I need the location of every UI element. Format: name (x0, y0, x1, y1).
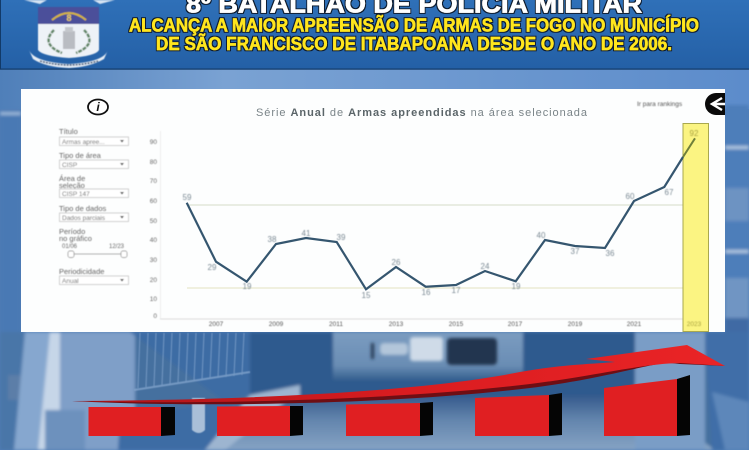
filter sidebar: Período (59, 227, 85, 236)
filter sidebar: CISP (62, 162, 77, 169)
filter sidebar: CISP 147 (62, 191, 90, 198)
data labels: 16 (422, 288, 431, 297)
filter sidebar: 12/23 (109, 244, 125, 250)
battalion emblem (24, 0, 115, 68)
data labels: 19 (512, 282, 521, 291)
data labels: 29 (208, 263, 217, 272)
chart title: Série Anual de Armas apreendidas na área selecionada (256, 107, 588, 119)
y axis: 40 (150, 237, 157, 244)
filter sidebar: seleção (59, 181, 85, 190)
data labels: 59 (183, 193, 192, 202)
data labels: 36 (606, 249, 615, 258)
filter sidebar: Tipo de dados (59, 204, 107, 213)
data line (187, 157, 683, 289)
filter sidebar: Periodicidade (59, 267, 104, 276)
data labels: 67 (665, 188, 674, 197)
info icon: i (96, 100, 100, 114)
y axis: 10 (150, 296, 157, 303)
x axis labels: 2011 (329, 321, 343, 328)
filter sidebar: no gráfico (59, 234, 92, 243)
y axis: 90 (150, 139, 157, 146)
chart panel (21, 89, 725, 332)
y axis: 30 (150, 257, 157, 264)
y axis: 0 (153, 313, 157, 320)
bar 2 (217, 406, 303, 436)
data labels: 60 (626, 192, 635, 201)
y axis: 70 (150, 178, 157, 185)
2023 line segment (683, 138, 695, 157)
rankings link: Ir para rankings (637, 101, 683, 108)
bar 4 (475, 393, 562, 436)
data labels: 41 (302, 229, 311, 238)
data labels: 40 (537, 231, 546, 240)
x axis labels: 2019 (568, 321, 583, 328)
y axis: 80 (150, 159, 157, 166)
reference lines (187, 204, 697, 206)
data labels: 19 (243, 282, 252, 291)
x axis labels: 2015 (449, 321, 464, 328)
filter sidebar: Tipo de área (59, 151, 102, 160)
x axis labels: 2017 (508, 321, 523, 328)
x axis labels: 2007 (209, 321, 224, 328)
filter sidebar (59, 127, 128, 285)
data labels: 38 (268, 235, 277, 244)
data labels: 39 (337, 233, 346, 242)
y axis (150, 131, 702, 320)
icon: back arrow (705, 93, 725, 115)
data labels: 92 (690, 129, 699, 138)
filter sidebar: Armas apree... (62, 139, 105, 146)
data labels: 37 (571, 247, 580, 256)
subtitle (129, 14, 699, 54)
x axis labels (209, 321, 702, 328)
bar 1 (88, 407, 175, 436)
filter sidebar: 01/06 (62, 244, 78, 250)
y axis: 60 (150, 198, 157, 205)
header banner (0, 0, 749, 70)
bar 5 (604, 375, 690, 436)
filter sidebar: Área de (59, 174, 85, 183)
x axis labels: 2021 (627, 321, 642, 328)
filter sidebar: Dados parciais (62, 215, 106, 222)
info icon (88, 100, 108, 114)
y axis: 50 (150, 218, 157, 225)
x axis labels: 2009 (269, 321, 284, 328)
subtitle: ALCANÇA A MAIOR APREENSÃO DE ARMAS DE FOGO NO MUNICÍPIO (129, 14, 699, 36)
battalion emblem: 8 (66, 13, 72, 23)
filter sidebar: Anual (62, 278, 79, 285)
data labels: 24 (481, 262, 490, 271)
data labels: 17 (452, 286, 461, 295)
subtitle: DE SÃO FRANCISCO DE ITABAPOANA DESDE O ANO DE 2006. (156, 33, 672, 54)
data labels (183, 129, 699, 300)
growth bars (88, 375, 690, 436)
filter sidebar: Título (59, 127, 78, 136)
data labels: 26 (392, 258, 401, 267)
data labels: 15 (362, 291, 371, 300)
bar 3 (346, 402, 433, 436)
line chart (150, 124, 708, 332)
yellow highlight 2023 (683, 124, 708, 332)
red growth arrow (72, 345, 725, 404)
y axis: 20 (150, 277, 157, 284)
x axis labels: 2013 (389, 321, 404, 328)
x axis labels: 2023 (687, 321, 702, 328)
